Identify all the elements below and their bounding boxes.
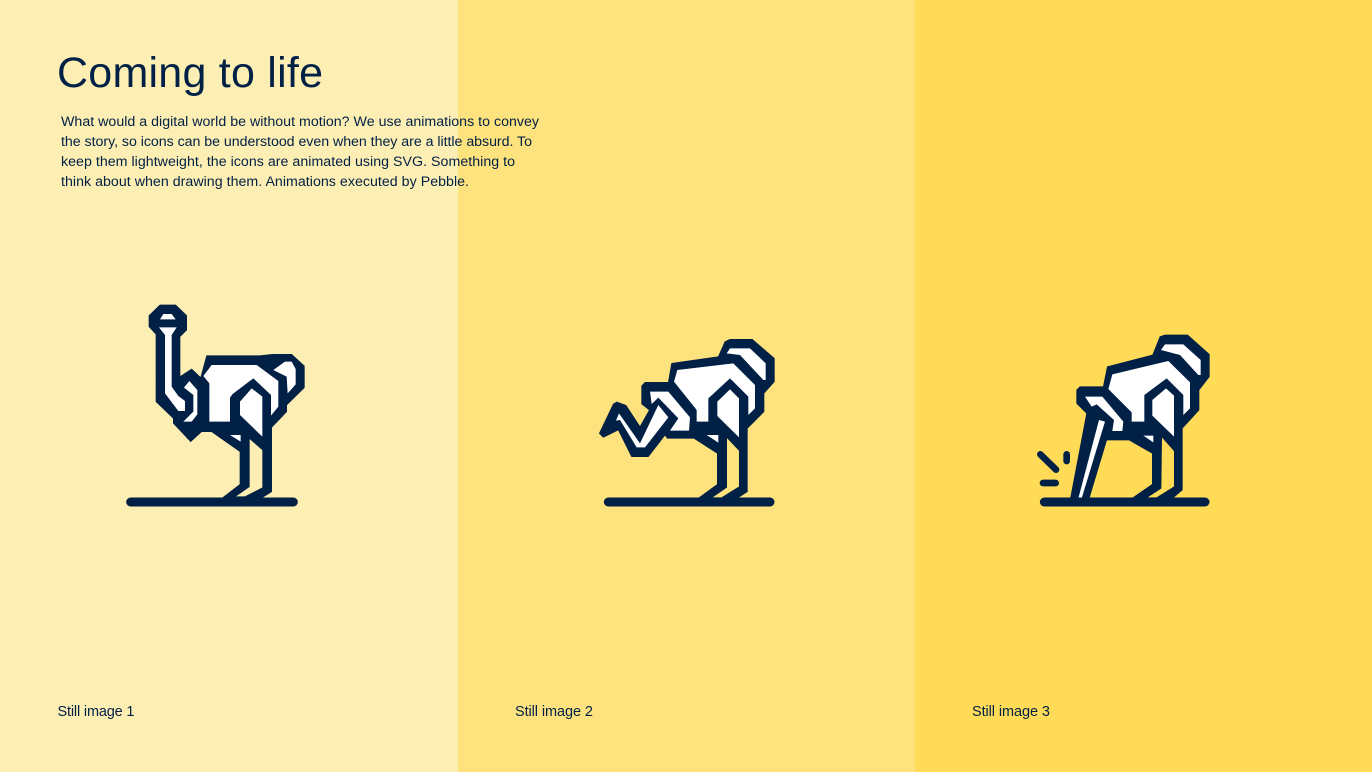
intro text block: think about when drawing them. Animations executed by Pebble. xyxy=(61,174,469,190)
caption: still image 3: Still image 3 xyxy=(972,704,1050,720)
icon: impact marks xyxy=(1040,454,1067,483)
panel: still 3 background xyxy=(915,0,1372,772)
intro text block: What would a digital world be without motion? We use animations to convey xyxy=(61,114,540,130)
intro text block: keep them lightweight, the icons are animated using SVG. Something to xyxy=(61,154,515,170)
title: Coming to life xyxy=(57,49,323,97)
intro text block: the story, so icons can be understood even when they are a little absurd. To xyxy=(61,134,532,150)
icon: ostrich head in ground xyxy=(1040,335,1209,502)
panel: still 2 background xyxy=(458,0,915,772)
icon: ostrich bending xyxy=(599,339,774,502)
caption: still image 1: Still image 1 xyxy=(58,704,134,720)
panel: still 1 background xyxy=(0,0,458,772)
intro text block xyxy=(61,114,540,190)
icon: ostrich standing xyxy=(131,305,304,502)
caption: still image 2: Still image 2 xyxy=(515,704,593,720)
